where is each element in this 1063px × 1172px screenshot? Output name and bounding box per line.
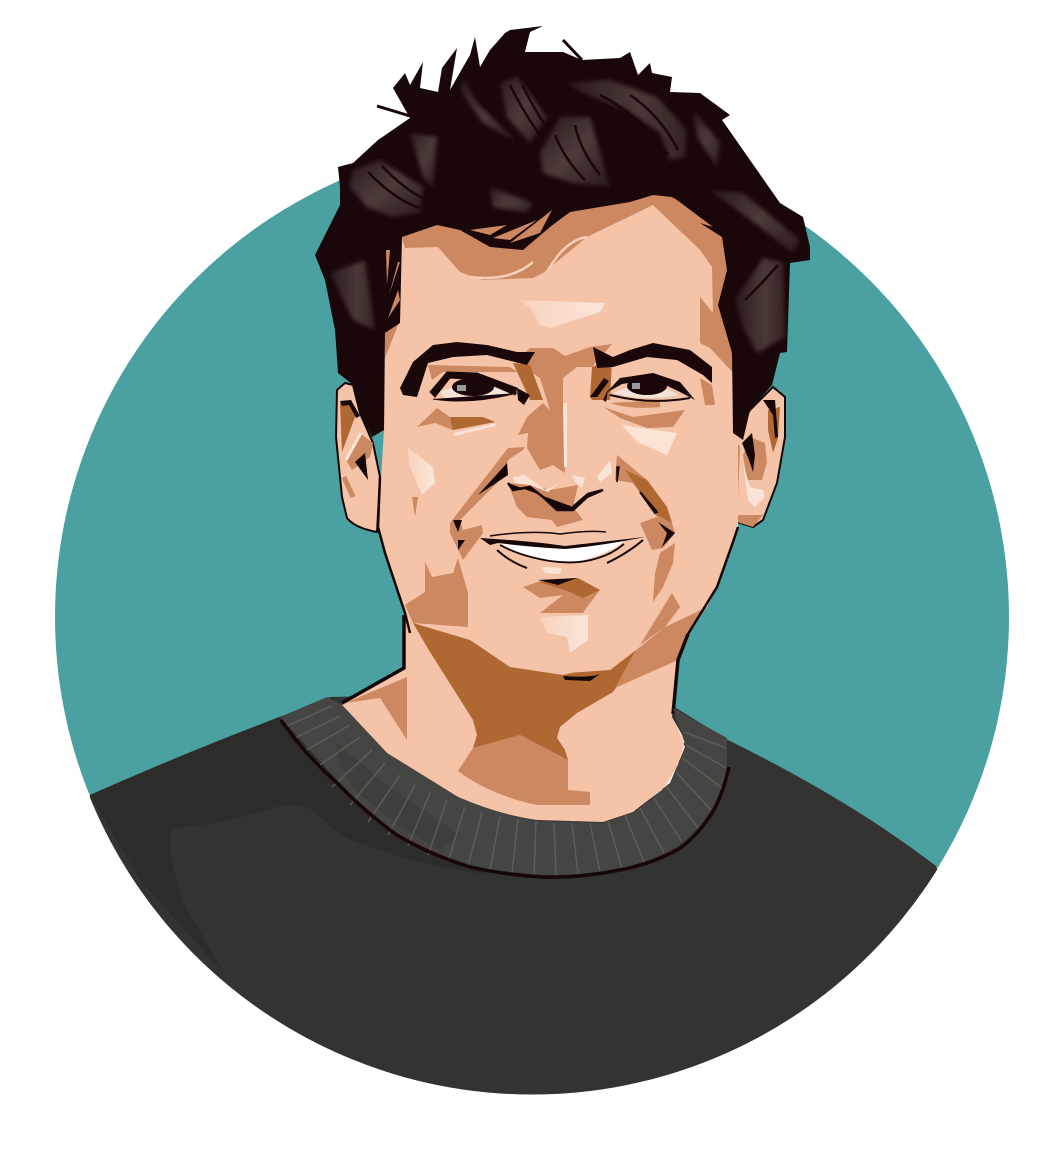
neck (342, 600, 707, 822)
neck deep shadow (413, 623, 640, 760)
face base (378, 185, 738, 673)
forehead crease (470, 237, 587, 278)
left cheek small shade (412, 497, 418, 517)
right ear (733, 387, 785, 527)
sweater collar (280, 697, 729, 877)
forehead highlight (520, 300, 605, 328)
collar inner shading (337, 743, 460, 850)
hair dark strokes (368, 85, 778, 300)
jaw shadow right (613, 607, 707, 692)
under-lip shadow (523, 578, 600, 613)
under-nose shadow (508, 483, 583, 527)
orange strands under hair (386, 197, 713, 318)
lower lip highlight (542, 567, 562, 574)
left ear (336, 383, 380, 532)
smile lines (453, 463, 675, 681)
left eye (430, 372, 530, 405)
neck highlight (632, 717, 685, 812)
left nasolabial band (450, 447, 525, 560)
face shading (385, 185, 738, 653)
forehead shadow (398, 185, 738, 378)
right eyebrow (593, 343, 712, 383)
under-lip deep shadow (538, 578, 600, 598)
collar rib stripes (287, 706, 726, 875)
left under-eye highlight (453, 423, 497, 436)
collar outline (281, 720, 729, 877)
hair (315, 26, 810, 440)
right eye (590, 373, 695, 402)
left cheek highlight (407, 447, 435, 495)
left lid crease (428, 365, 518, 380)
right lid shading (590, 360, 612, 400)
face outline (378, 477, 738, 634)
left eye orange (513, 363, 543, 400)
nose stripe highlight (563, 403, 567, 467)
teal background circle (55, 140, 1009, 1094)
right lower lid shade (610, 400, 660, 408)
chin highlight (540, 615, 588, 653)
sweater body (90, 696, 938, 1094)
left under-eye band (417, 408, 495, 430)
left under-eye deep (450, 417, 495, 430)
left eyebrow (400, 342, 535, 397)
neck left shadow (345, 677, 407, 740)
left temple shadow (385, 320, 400, 358)
right nasolabial band (615, 455, 675, 550)
right nasolabial orange (625, 470, 672, 523)
right under-eye highlight (622, 425, 677, 455)
hair highlights (330, 77, 800, 353)
right cheek stripe (653, 543, 675, 602)
neck lower shadow (458, 735, 590, 805)
neck outlines (342, 615, 688, 714)
nose (508, 483, 603, 510)
nose highlights (513, 460, 612, 492)
sweater dark shading (90, 716, 282, 795)
left cheek lower shadow (405, 558, 468, 627)
right eyebrow side shade (700, 378, 715, 405)
stray hair strands (377, 40, 582, 116)
jaw triangle (640, 593, 680, 645)
right under-eye band (603, 407, 685, 428)
nose bridge shadow (515, 344, 612, 473)
mouth (480, 531, 645, 585)
